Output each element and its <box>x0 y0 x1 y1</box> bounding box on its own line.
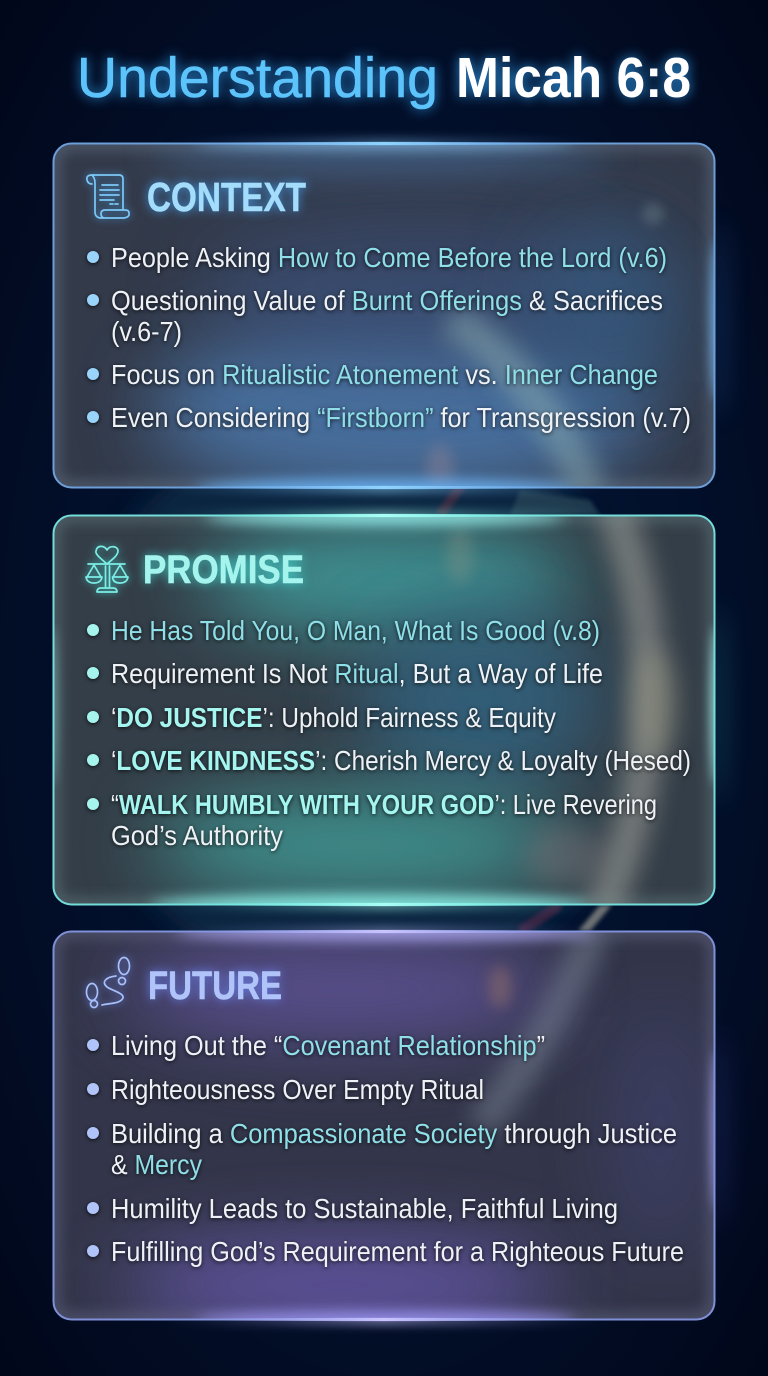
bullet list: future: Humility Leads to Sustainable, Faithful Living <box>111 1193 618 1224</box>
bullet list: context: (v.6-7) <box>111 316 182 347</box>
bullet list: context: Focus on Ritualistic Atonement vs. Inner Change <box>111 359 658 390</box>
bullet list: future: & Mercy <box>111 1149 202 1180</box>
heading: promise: PROMISE <box>143 548 304 592</box>
icon: scroll <box>87 175 129 218</box>
bullet list: future: Fulfilling God’s Requirement for a Righteous Future <box>111 1236 684 1267</box>
bullet list: promise: He Has Told You, O Man, What Is Good (v.8) <box>111 615 600 646</box>
bullet list: context: People Asking How to Come Before the Lord (v.6) <box>111 242 667 273</box>
bullet list: context <box>87 242 691 433</box>
bullet list: promise: ‘LOVE KINDNESS’: Cherish Mercy & Loyalty (Hesed) <box>111 745 691 776</box>
bullet list: future: Living Out the “Covenant Relationship” <box>111 1030 545 1061</box>
heading: context: CONTEXT <box>147 174 306 220</box>
bullet list: context: Questioning Value of Burnt Offerings & Sacrifices <box>111 285 663 316</box>
panel: future <box>53 922 721 1330</box>
bullet list: future <box>87 1030 684 1267</box>
title: Understanding <box>77 46 438 110</box>
title <box>77 46 691 110</box>
icon: heart and scales <box>86 546 128 592</box>
icon: footprints <box>86 958 130 1008</box>
bullet list: promise <box>87 615 691 851</box>
bullet list: context: Even Considering “Firstborn” for Transgression (v.7) <box>111 402 691 433</box>
panel: promise <box>48 505 721 917</box>
bullet list: future: Righteousness Over Empty Ritual <box>111 1074 484 1105</box>
title: Micah 6:8 <box>456 46 691 110</box>
bullet list: promise: God’s Authority <box>111 820 283 851</box>
heading: future: FUTURE <box>148 964 282 1008</box>
panel: context <box>53 135 721 500</box>
bullet list: promise: ‘DO JUSTICE’: Uphold Fairness & Equity <box>111 702 556 733</box>
bullet list: future: Building a Compassionate Society through Justice <box>111 1118 677 1149</box>
future panel frame <box>53 922 721 1330</box>
context panel frame <box>53 135 721 500</box>
bullet list: promise: Requirement Is Not Ritual, But a Way of Life <box>111 658 603 689</box>
bullet list: promise: “WALK HUMBLY WITH YOUR GOD’: Live Revering <box>111 789 657 820</box>
promise panel frame <box>48 505 721 917</box>
